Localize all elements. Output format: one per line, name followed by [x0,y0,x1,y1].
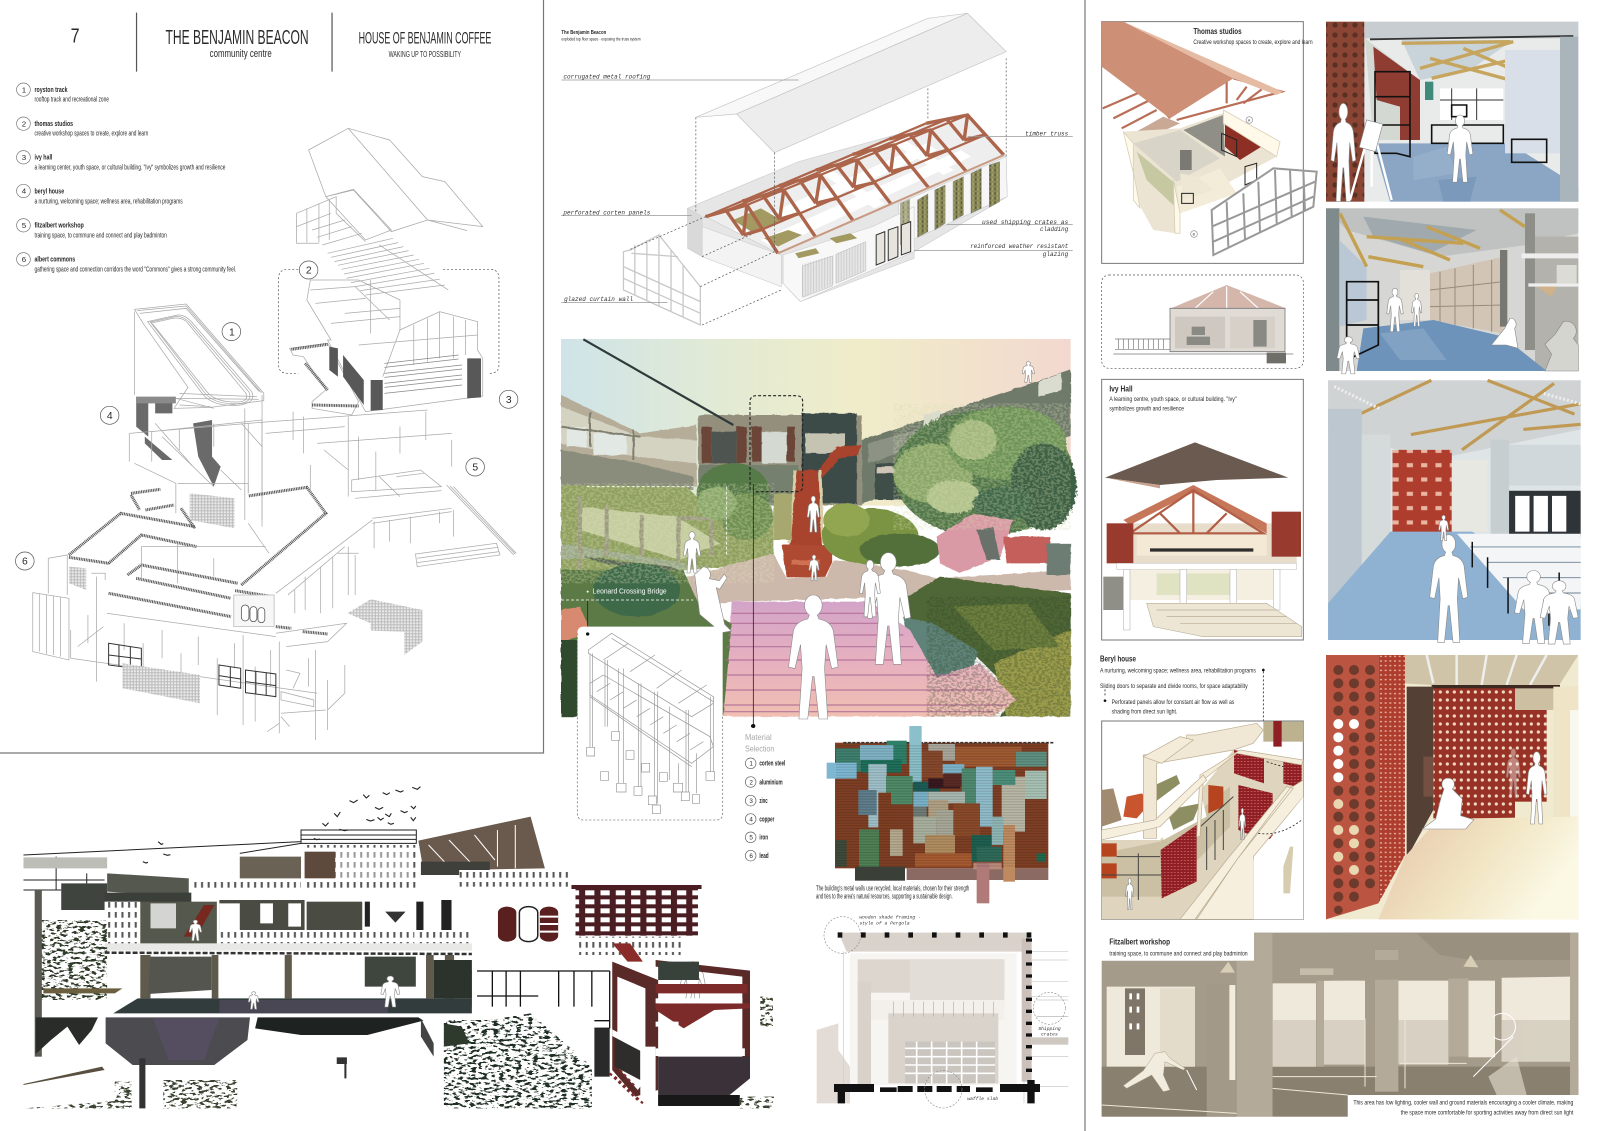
legend item 1: royston track [34,86,68,94]
dark stair block beryl [136,397,221,487]
Fitzalbert heading: Fitzalbert workshop [1109,937,1170,946]
perforated panels [69,493,422,703]
studio section sketch [1102,275,1303,368]
right section frames [551,960,750,1108]
dark cladding panels [329,347,481,411]
callout numbers: 3 [506,395,512,406]
legend item 3: a learning center, youth space, or cultural building. "Ivy" symbolizes growth and resilience [34,164,226,172]
roof trusses beneath [1103,78,1282,140]
hall upper level [1107,485,1301,569]
floating roof [1105,442,1288,488]
Ivy Hall heading: symbolizes growth and resilience [1109,406,1184,413]
Beryl house text: Perforated panels allow for constant air flow as well as [1112,699,1235,706]
panel frame [1102,22,1303,263]
Beryl house text [1100,654,1257,715]
railings [69,344,359,634]
main stair [723,602,1017,717]
leader dots [1104,669,1265,730]
Beryl house panel [1100,654,1578,919]
studio roof [1102,22,1283,118]
Thomas studios panel [1102,22,1317,368]
studio perspectives [1326,22,1578,374]
far right roof truss [418,817,569,887]
callout numbers: 2 [306,266,312,277]
centre tree [697,463,792,540]
legend item 6: gathering space and connection corridors the word "Commons" gives a strong community feel. [34,266,236,274]
legend item 6: albert commons [34,256,75,264]
Beryl house text: Beryl house [1100,654,1136,664]
left elevated walkway [561,395,697,490]
legend item 2: thomas studios [34,120,73,128]
material labels: timber truss [1025,131,1068,139]
Thomas studios and Ivy Hall block [290,280,483,415]
perforated panels [803,242,866,297]
Beryl house text: shading from direct sun light. [1112,708,1177,715]
Beryl house text: Sliding doors to separate and divide rooms, for space adaptability [1100,683,1248,690]
tree base [43,988,122,993]
legend item 5: 5 [22,221,26,230]
hedge behind stair [822,503,940,567]
Fitzalbert caption [1353,1099,1574,1116]
legend item 4: beryl house [34,187,64,195]
big tree [893,407,1077,537]
building shell [688,115,1007,302]
studio rooms [1123,110,1280,233]
diagram title [561,30,641,42]
tiny people in section [189,920,706,1009]
stone steps [903,617,978,678]
recycled metal wall collage [827,726,1053,903]
legend item 3: 3 [22,153,26,162]
callout numbers: 6 [22,557,28,568]
glazed wall [477,971,610,1028]
callout numbers: 4 [107,411,113,422]
material selection list: 3 [749,798,753,805]
diagram title: The Benjamin Beacon [561,30,607,36]
Thomas studios heading: Thomas studios [1193,26,1242,36]
studio perspective 2 [1326,208,1578,374]
right wing [862,370,1071,503]
header [71,13,491,72]
material selection list: zinc [759,798,768,805]
callout number circles [16,261,518,570]
column structure [33,410,516,740]
bridge detail, materials, plan [577,627,1068,1108]
material selection list: 5 [749,835,753,842]
leader lines [561,80,1073,303]
material selection list: lead [759,853,769,860]
page frame lines [0,0,1085,1131]
sectional plan: crates [1041,1032,1058,1038]
ground and posts [23,1057,347,1108]
legend item 3 [17,151,226,172]
gravel [683,553,1071,607]
Thomas studios heading [1193,26,1313,46]
callout numbers [22,266,512,568]
legend item 2 [17,117,148,138]
dashed projection lines [630,58,1006,325]
left garden and bridge [561,485,773,583]
leaf speckle [561,403,1071,717]
curtain wall [623,235,700,325]
legend item 1: 1 [22,85,26,94]
centre building [698,413,862,505]
rooftop track [134,304,264,520]
material selection list: copper [759,816,775,823]
legend item 2: 2 [22,119,26,128]
material selection list: Material [745,732,772,742]
legend item 4: 4 [22,187,27,196]
Beryl house cutaway [1102,721,1303,919]
title: The Benjamin Beacon: THE BENJAMIN BEACON [166,27,309,49]
roof panel [696,13,1006,153]
Ivy Hall heading: A learning centre, youth space, or cultural building. "Ivy" [1109,396,1237,403]
page number: 7 [71,25,80,47]
section tags: B [1193,232,1196,236]
red staircase [782,445,862,577]
material selection list: corten steel [759,761,785,768]
material labels: glazed curtain wall [564,296,633,304]
dashed bracket around Thomas studios [279,269,499,373]
Beryl house perspective [1326,655,1578,919]
Fitzalbert workshop panel [1102,933,1578,1117]
sectional plan: wooden shade framing - [859,915,921,921]
material selection list: 4 [749,816,753,823]
tagline: WAKING UP TO POSSIBILITY [389,49,461,59]
blossom tree trunk [937,513,1071,575]
white block with oval windows [472,890,574,970]
left tree [41,920,107,1000]
shipping crate windows [900,162,1000,245]
header dividers [137,13,332,72]
watercolour courtyard perspective [561,339,1077,728]
lower left planting [561,563,732,717]
metal wall caption: and ties to the area's natural resources, supporting a sustainable design. [816,894,953,901]
Thomas studios heading: Creative workshop spaces to create, explore and learn [1193,39,1313,46]
panel frame [1102,379,1303,640]
roof lines and upper level [23,830,418,910]
metal wall caption: The building's metal walls use recycled, local materials, chosen for their strength [816,886,969,893]
material selection list: 1 [749,761,753,768]
studio perspective 3 [1328,380,1581,644]
lower right planting [907,577,1071,717]
pergola grid [571,885,702,962]
legend item 6 [17,253,236,274]
workshop perspective [1102,933,1578,1117]
legend item 5: fitzalbert workshop [34,222,84,230]
lower storey [35,890,472,1065]
material labels: corrugated metal roofing [563,74,650,82]
big foreground tree [444,1007,594,1108]
bridge inset [577,627,723,820]
legend: spaces list [17,83,236,274]
diagram title: exploded top floor space - exposing the truss system [561,37,641,42]
material selection list: iron [759,835,768,842]
legend item 5: training space, to commune and connect and play badminton [34,231,167,239]
title: House of Benjamin Coffee: HOUSE OF BENJAMIN COFFEE [359,29,491,47]
material selection list: Selection [745,744,775,754]
stair treads [723,613,1007,712]
oval openings [234,595,274,627]
window frames [109,643,276,697]
material labels: reinforced weather resistant [970,243,1068,251]
studio perspective 1 [1326,22,1578,202]
material labels: used shipping crates as [982,219,1068,227]
long section drawing [23,787,774,1108]
exploded axonometric: buildings [16,261,518,740]
material labels: cladding [1040,226,1068,234]
section tags [1191,117,1253,237]
material selection list [745,724,785,861]
Beryl house text: A nurturing, welcoming space; wellness area, rehabilitation programs [1100,667,1257,674]
legend item 1: rooftop track and recreational zone [34,96,109,104]
material labels [563,74,1068,304]
people [683,362,1035,719]
legend item 2: creative workshop spaces to create, explore and learn [34,130,148,138]
legend item 6: 6 [22,255,26,264]
legend item 5 [17,219,167,239]
subtitle: community centre: community centre [210,48,272,60]
glazing [876,222,911,265]
Fitzalbert heading [1102,933,1254,961]
mid level [105,890,472,954]
exploded axonometric: roof of Thomas studios [297,128,483,295]
sectional plan: style of a Pergola [859,920,910,926]
bridge label: Leonard Crossing Bridge [593,586,667,595]
material selection list: 2 [749,779,753,786]
legend item 4 [17,184,183,205]
sectional plan: Shipping [1038,1026,1061,1032]
material selection list: 6 [749,853,753,860]
section tags: A [1248,118,1251,122]
material labels: perforated corten panels [563,210,650,218]
Ivy Hall heading: Ivy Hall [1109,384,1133,394]
timber trusses [706,115,1004,253]
exploded truss diagram [561,13,1073,325]
curtain wall [1212,168,1317,255]
birds [143,787,420,863]
sectional plan [817,915,1068,1108]
material selection list: aluminium [759,779,783,786]
Fitzalbert heading: training space, to commune and connect and play badminton [1109,950,1248,957]
metal wall caption [816,886,969,901]
callout numbers: 1 [229,327,235,338]
sectional plan: waffle slab [967,1096,998,1102]
material labels: glazing [1043,251,1068,259]
legend item 4: a nurturing, welcoming space; wellness area, rehabilitation programs [34,197,183,205]
ground planting [23,997,774,1108]
Ivy Hall panel [1102,379,1303,640]
legend item 1 [17,83,109,104]
interior floor bands [733,137,971,248]
Ivy Hall heading [1109,384,1237,413]
callout numbers: 5 [472,463,478,474]
sky line and dashed guides [561,339,803,728]
legend item 3: ivy hall [34,154,52,162]
sky [561,339,1071,506]
hall lower level [1103,569,1302,637]
